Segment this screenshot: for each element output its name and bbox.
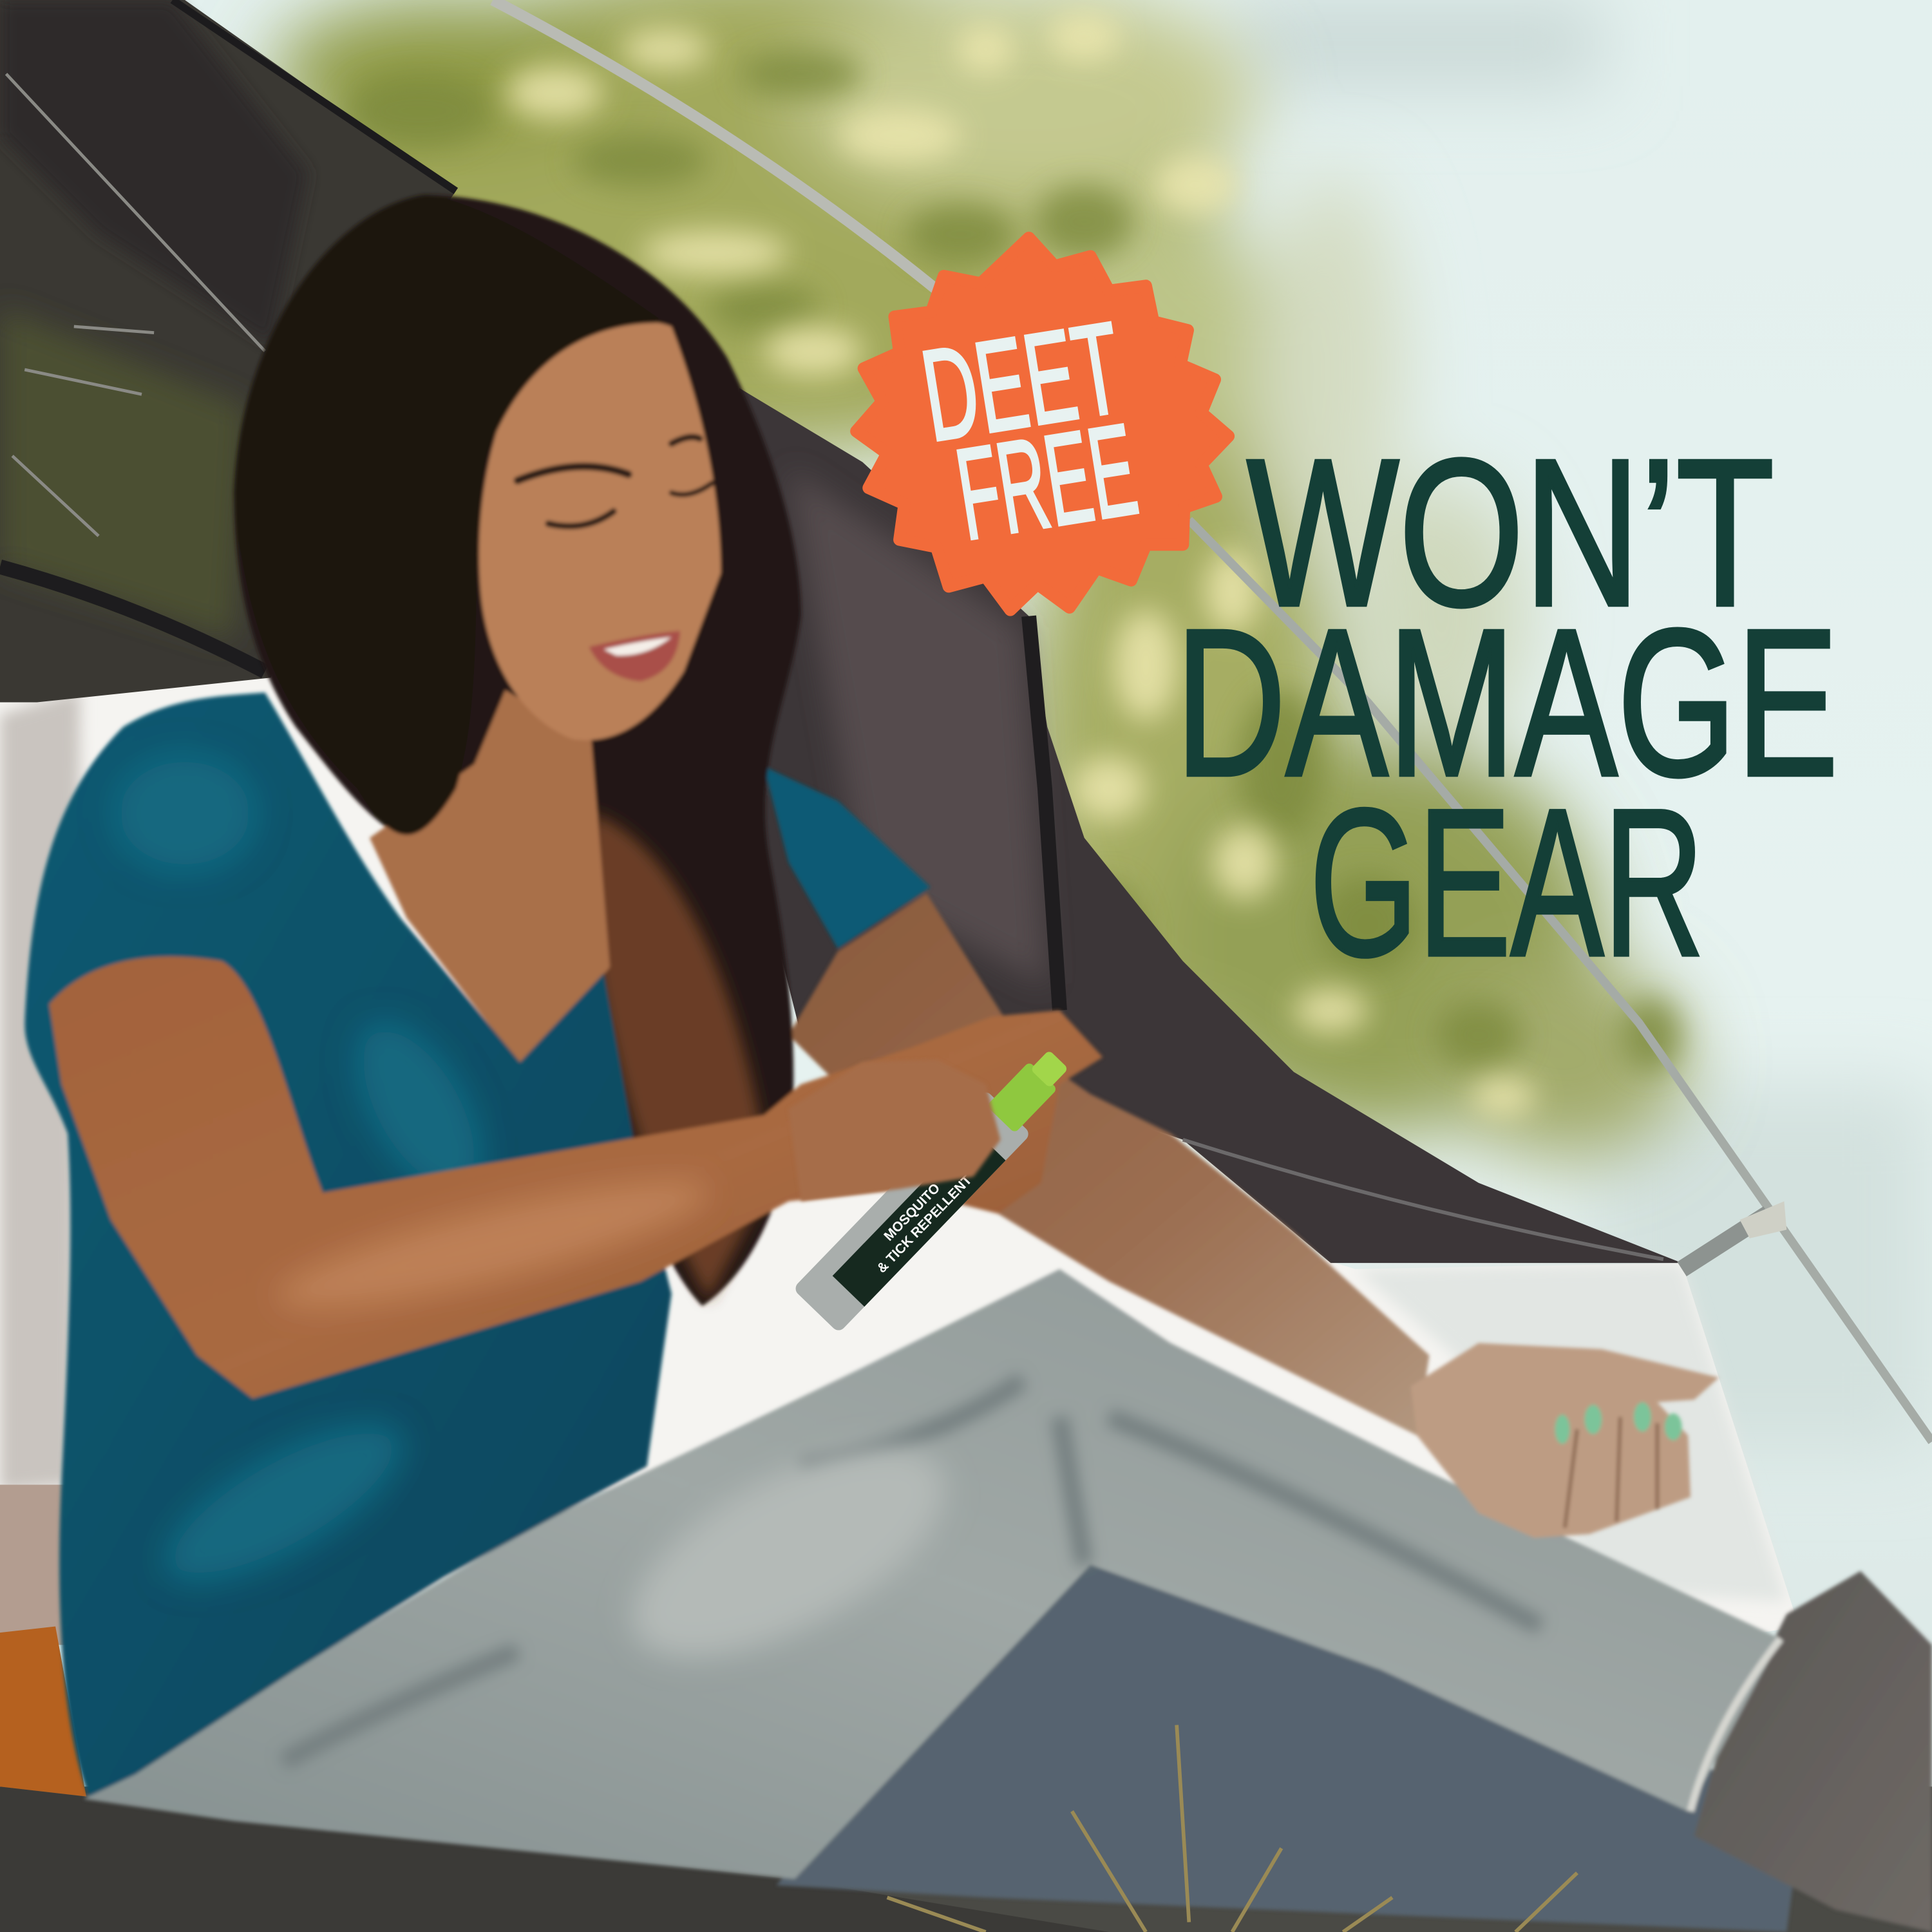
boot [1694,1571,1932,1932]
hair brown highlight [585,813,770,1300]
badge text: FREE [948,396,1146,567]
product: repellent spray bottle: MOSQUITO [881,1180,943,1244]
arm highlight [269,1157,716,1332]
shirt back sleeve [764,766,931,949]
jean highlight [601,1406,976,1699]
neck and chest [370,690,610,1070]
near leg: light grey jeans [84,1269,1781,1879]
shirt highlights [111,752,511,1614]
far leg: darker denim [776,1546,1793,1932]
product: repellent spray bottle: & TICK REPELLENT [874,1173,975,1276]
jean hem fringe [1690,1639,1781,1811]
extended hand [1411,1343,1719,1538]
heading: WON'T DAMAGE GEAR: GEAR [1310,766,1704,999]
shirt [24,692,672,1797]
tent: dark mesh door top left [0,0,456,703]
grass [887,1725,1577,1932]
hair back [234,194,801,1306]
jean fold shadows [283,1380,1540,1762]
tent: interior light fabric [0,653,1799,1645]
nails [1555,1402,1682,1444]
badge text: DEET [913,294,1131,468]
background: foliage dark leaves [345,50,1681,1072]
background: foliage highlights [505,12,1535,1116]
heading: WON'T DAMAGE GEAR: WON’T [1247,415,1774,649]
tent pole [493,0,1932,1442]
tent: dark wall on the right of the woman [739,388,1682,1263]
heading: WON'T DAMAGE GEAR [1175,415,1839,999]
product: repellent spray bottle [793,1037,1082,1333]
face [479,321,721,740]
near arm [50,956,1103,1399]
badge: DEET FREE [857,238,1229,610]
hand holding bottle [788,1059,1001,1201]
ground and tent floor [0,1627,1932,1932]
background: blurred foliage [271,0,1688,1158]
finger gaps [1565,1417,1657,1528]
eyes, brows and mouth [518,437,712,526]
hair front lock [234,194,665,835]
right upper arm and forearm [788,893,1429,1435]
badge text [913,294,1146,567]
